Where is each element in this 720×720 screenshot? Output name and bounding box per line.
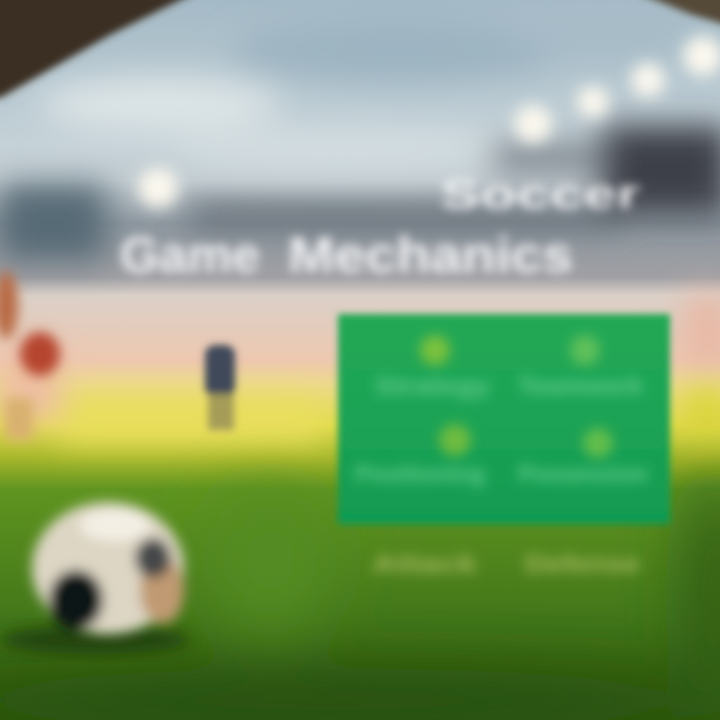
icon: bottom right [583,428,613,458]
floodlights [138,36,720,208]
panel text [355,373,648,488]
player in distance [205,345,235,430]
panel items [355,335,648,488]
heading [120,170,640,283]
icon: top right [570,335,600,365]
heading: Game [120,227,260,283]
icon: bottom left [439,424,471,456]
panel text: Strategy [375,373,491,400]
heading: Mechanics [288,227,573,283]
panel text: Possession [518,461,648,488]
player in red, left edge [0,271,60,440]
captions under panel: Attack [372,551,478,578]
panel text: Teamwork [518,373,644,400]
roof overhang top right [632,0,720,26]
heading: Soccer [440,170,640,217]
captions under panel [372,551,640,578]
green panel [338,314,670,524]
icon: soccer ball [0,502,190,654]
panel text: Positioning [355,461,485,488]
captions under panel: Defense [525,551,640,578]
roof overhang top left [0,0,200,98]
icon: top left [420,335,450,365]
